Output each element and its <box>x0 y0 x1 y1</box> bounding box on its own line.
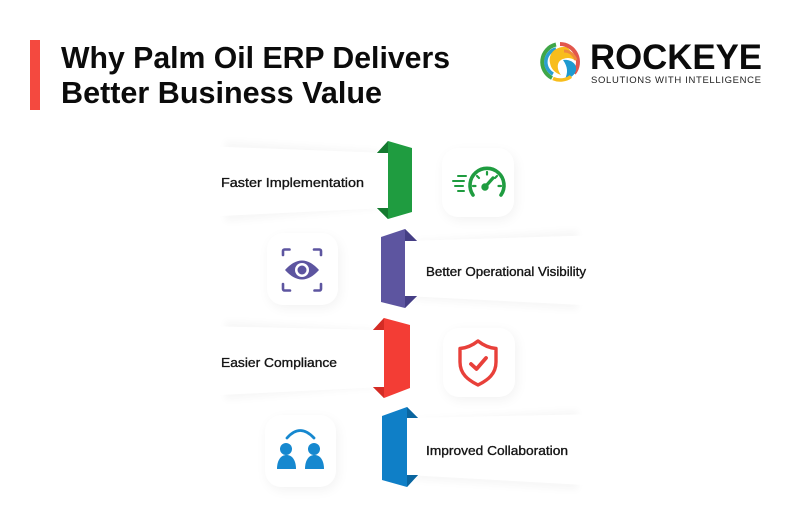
banner shadow <box>225 141 380 222</box>
label: Improved Collaboration <box>426 443 568 458</box>
banner <box>407 414 602 486</box>
label: Faster Implementation <box>221 175 364 190</box>
icon: shield check <box>460 341 496 385</box>
title <box>61 40 450 110</box>
card <box>265 415 336 487</box>
card shadow <box>445 331 517 400</box>
logo mark <box>542 44 578 80</box>
title: Why Palm Oil ERP Delivers <box>61 40 450 75</box>
row 1: faster implementation <box>200 141 516 222</box>
logo wordmark: ROCKEYE <box>590 38 762 77</box>
card shadow <box>267 419 338 490</box>
banner <box>405 235 602 306</box>
ribbon <box>381 229 417 308</box>
logo tagline: SOLUTIONS WITH INTELLIGENCE <box>591 75 761 86</box>
ribbon <box>382 407 418 487</box>
icon: speedometer <box>453 168 504 195</box>
banner <box>200 326 384 396</box>
card <box>267 233 338 305</box>
title accent bar <box>30 40 40 110</box>
ribbon <box>377 141 412 219</box>
title: Better Business Value <box>61 75 382 110</box>
row 3: easier compliance <box>200 318 517 400</box>
icon: two people <box>277 430 324 469</box>
label: Easier Compliance <box>221 355 337 370</box>
card shadow <box>444 152 516 220</box>
logo <box>542 38 762 86</box>
card <box>443 328 515 397</box>
banner shadow <box>412 230 578 310</box>
banner shadow <box>225 321 378 400</box>
card shadow <box>269 237 340 308</box>
banner <box>200 146 388 217</box>
row 2: better operational visibility <box>267 229 602 310</box>
row 4: improved collaboration <box>265 407 602 490</box>
banner shadow <box>414 410 578 490</box>
label: Better Operational Visibility <box>426 264 587 279</box>
card <box>442 148 514 217</box>
icon: eye in frame <box>283 250 321 290</box>
ribbon <box>373 318 410 398</box>
